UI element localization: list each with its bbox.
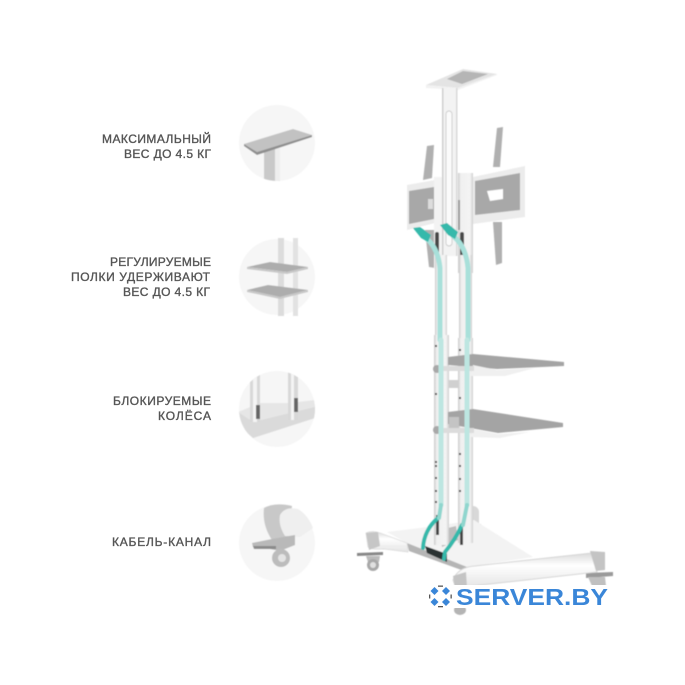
- VESA arms: [423, 127, 503, 268]
- icon: top shelf circle: [239, 105, 315, 182]
- rear caster left: [357, 552, 383, 571]
- lower columns: [434, 255, 473, 545]
- label: lockable wheels: КОЛЁСА: [158, 409, 211, 423]
- label: adjustable shelves: ПОЛКИ УДЕРЖИВАЮТ: [71, 270, 211, 284]
- cable plugs: [413, 223, 458, 242]
- top shelf: [426, 69, 497, 90]
- label: maximum load: [102, 131, 212, 161]
- label: adjustable shelves: РЕГУЛИРУЕМЫЕ: [110, 255, 211, 269]
- rear caster right: [467, 506, 613, 586]
- label: lockable wheels: БЛОКИРУЕМЫЕ: [113, 394, 211, 408]
- label: lockable wheels: [113, 394, 211, 423]
- feature 2: adjustable shelves: [71, 238, 315, 316]
- label: maximum load: ВЕС ДО 4.5 КГ: [124, 147, 212, 161]
- feature 3: lockable wheels: [113, 371, 315, 447]
- front wheel: [454, 605, 466, 615]
- label: maximum load: МАКСИМАЛЬНЫЙ: [102, 131, 211, 146]
- label: adjustable shelves: [71, 255, 211, 299]
- label: adjustable shelves: ВЕС ДО 4.5 КГ: [123, 285, 210, 299]
- cables: [423, 236, 468, 559]
- feature 4: cable channel: [112, 504, 315, 581]
- icon: shelves circle: [239, 238, 315, 316]
- feature 1: maximum load: [102, 105, 315, 182]
- icon: base circle: [238, 371, 315, 447]
- upper columns: [434, 88, 473, 273]
- mounting plates: [407, 166, 525, 230]
- icon: caster circle: [239, 504, 315, 581]
- base plate: [366, 520, 605, 588]
- illustration: mobile TV stand: [357, 69, 613, 615]
- label: cable channel: КАБЕЛЬ-КАНАЛ: [112, 535, 211, 549]
- media shelves: [433, 354, 564, 438]
- logo: SERVER.BY: [428, 584, 612, 610]
- logo text: SERVER.BY: [456, 584, 608, 610]
- icon: logo mark: [429, 586, 452, 607]
